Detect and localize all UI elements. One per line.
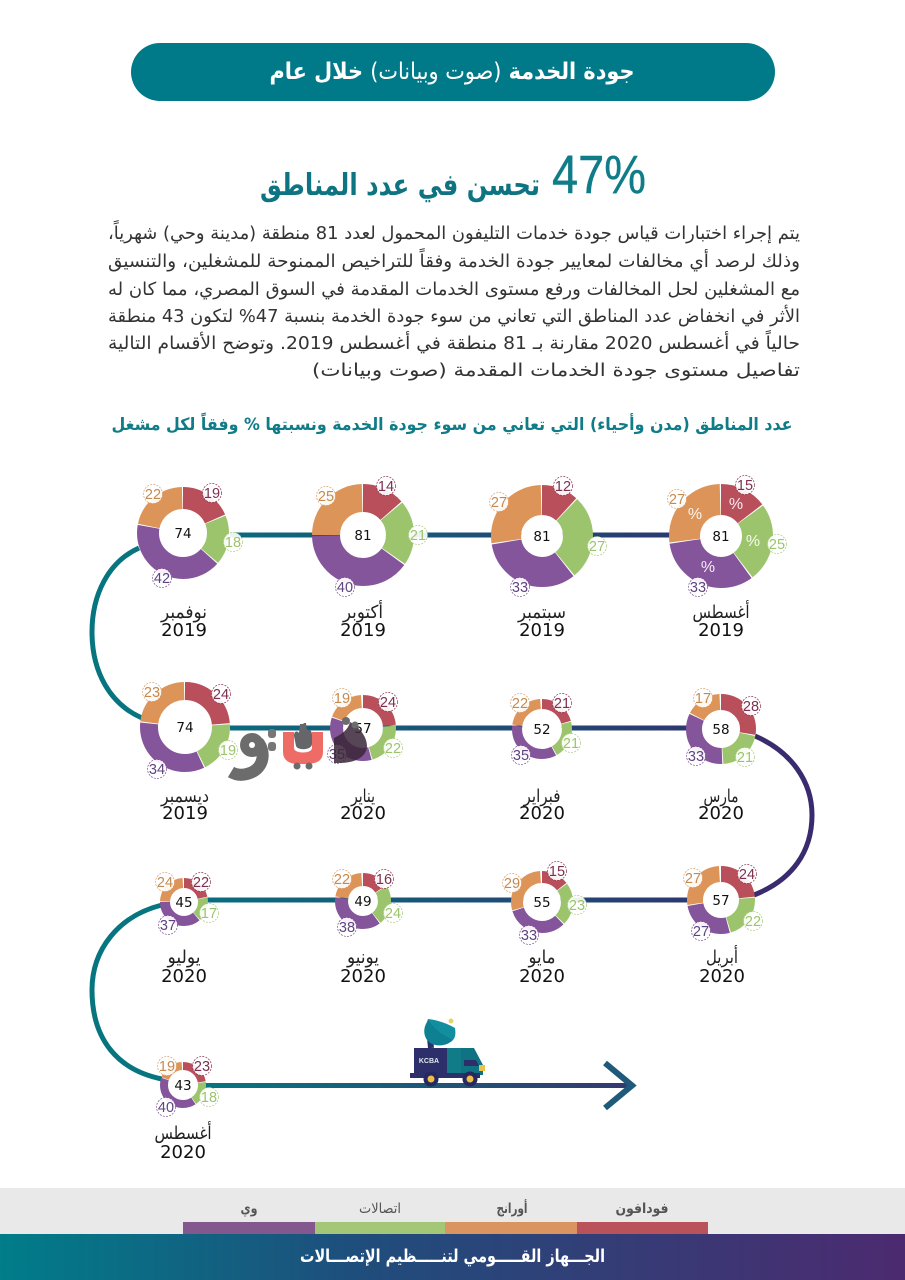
donut: June 2020 [332, 870, 402, 936]
donut: August 2020: 19 [159, 1059, 175, 1075]
donut: September 2019: 27 [589, 539, 605, 555]
donut: April 2020: 24 [739, 867, 755, 883]
donut: August 2019: % [729, 496, 743, 513]
donut: February 2020: 52 [533, 722, 551, 738]
intro paragraph: تفاصيل مستوى جودة الخدمات المقدمة (صوت وبيانات) [312, 360, 800, 381]
legend: Etisalat: اتصالات [359, 1201, 401, 1217]
label: August 2019: 2019 [698, 620, 744, 641]
label: February 2020: 2020 [519, 803, 565, 824]
label: June 2020: يونيو [346, 947, 379, 968]
label: February 2020 [519, 786, 565, 824]
intro paragraph: وذلك لرصد أي مخالفات لمعايير جودة الخدمة وفقاً للتراخيص الممنوحة للمشغلين، والتنسيق [108, 248, 800, 272]
label: July 2020: 2020 [161, 966, 207, 987]
donut: February 2020 [510, 694, 580, 764]
label: October 2019: 2019 [340, 620, 386, 641]
label: December 2019: 2019 [162, 803, 208, 824]
donut: November 2019: 22 [145, 487, 161, 503]
label: April 2020: أبريل [706, 945, 738, 968]
title banner: جودة الخدمة (صوت وبيانات) خلال عام [270, 59, 634, 85]
headline: 47% improvement: 47% [552, 145, 646, 205]
donut: June 2020: 22 [334, 872, 350, 888]
intro paragraph: الأثر في انخفاض عدد المناطق التي تعاني من سوء جودة الخدمة بنسبة 47% لتكون 43 منطقة [108, 305, 800, 327]
donut: January 2020: 35 [329, 747, 345, 763]
donut: June 2020: 49 [354, 894, 372, 910]
label: January 2020: 2020 [340, 803, 386, 824]
donut: November 2019: 19 [204, 486, 220, 502]
donut: March 2020 [686, 688, 760, 766]
legend: Orange [445, 1199, 577, 1234]
label: December 2019: ديسمبر [160, 786, 209, 807]
headline: 47% improvement [260, 145, 646, 205]
label: November 2019: 2019 [161, 620, 207, 641]
donut: November 2019: 18 [225, 535, 241, 551]
legend: Etisalat [315, 1201, 445, 1234]
donut: September 2019: 12 [555, 479, 571, 495]
footer bar [0, 1234, 905, 1280]
label: August 2020: 2020 [160, 1142, 206, 1163]
headline: 47% improvement: تحسن في عدد المناطق [260, 168, 540, 203]
donut: August 2019: % [746, 533, 760, 550]
donut: February 2020: 35 [513, 748, 529, 764]
intro paragraph [108, 220, 800, 381]
label: November 2019: نوفمبر [160, 602, 207, 623]
legend: Vodafone: فودافون [616, 1201, 668, 1217]
donut: April 2020: 22 [745, 914, 761, 930]
donut: July 2020 [156, 872, 218, 934]
intro paragraph: حالياً في أغسطس 2020 مقارنة بـ 81 منطقة في أغسطس 2019. وتوضح الأقسام التالية [108, 330, 800, 354]
donut: December 2019: 23 [144, 685, 160, 701]
donut: October 2019: 25 [318, 489, 334, 505]
donut: November 2019: 42 [154, 571, 170, 587]
donut: August 2020: 40 [158, 1100, 174, 1116]
donut: August 2019: 81 [712, 529, 730, 545]
donut: March 2020: 21 [737, 750, 753, 766]
label: December 2019 [160, 786, 209, 824]
label: March 2020: مارس [704, 786, 738, 807]
label: September 2019: سبتمبر [517, 602, 566, 623]
donut: September 2019: 27 [491, 495, 507, 511]
donut: March 2020: 28 [743, 699, 759, 715]
donut: August 2019: 33 [690, 580, 706, 596]
label: September 2019 [517, 602, 566, 641]
donut: January 2020 [328, 688, 402, 764]
donut: January 2020: 57 [354, 721, 372, 737]
donut: May 2020: 33 [521, 928, 537, 944]
label: May 2020: 2020 [519, 966, 565, 987]
donut: October 2019: 81 [354, 528, 372, 544]
label: February 2020: فبراير [523, 786, 560, 807]
donut: June 2020: 24 [385, 906, 401, 922]
legend: Vodafone [577, 1201, 708, 1234]
donut: July 2020: 22 [193, 875, 209, 891]
label: April 2020 [699, 945, 745, 987]
legend: WE [183, 1201, 315, 1234]
donut: August 2019 [668, 476, 786, 596]
icon: network truck with dish [410, 1018, 485, 1086]
donut: October 2019: 14 [378, 479, 394, 495]
donut: August 2020 [156, 1056, 218, 1116]
label: June 2020 [340, 947, 386, 987]
donut: March 2020: 33 [688, 749, 704, 765]
donut: December 2019: 24 [213, 687, 229, 703]
donut: January 2020: 22 [385, 741, 401, 757]
donut: July 2020: 24 [157, 875, 173, 891]
donut: January 2020: 24 [380, 695, 396, 711]
donut: August 2020: 43 [174, 1078, 192, 1094]
footer bar: الجـــهاز القـــــومي لتنـــــظيم الإتصـــالات [300, 1246, 605, 1267]
donut: July 2020: 17 [201, 906, 217, 922]
legend band [0, 1188, 905, 1234]
label: September 2019: 2019 [519, 620, 565, 641]
watermark logo [231, 717, 367, 775]
donut: July 2020: 37 [160, 918, 176, 934]
donut: July 2020: 45 [175, 895, 193, 911]
donut: December 2019: 74 [176, 720, 194, 736]
donut: October 2019: 21 [410, 528, 426, 544]
label: April 2020: 2020 [699, 966, 745, 987]
label: July 2020 [161, 947, 207, 987]
donut: May 2020: 15 [549, 864, 565, 880]
donut: October 2019: 40 [337, 580, 353, 596]
donut: February 2020: 21 [554, 696, 570, 712]
label: June 2020: 2020 [340, 966, 386, 987]
donut: June 2020: 16 [376, 872, 392, 888]
donut: May 2020 [502, 862, 586, 944]
donut: March 2020: 58 [712, 722, 730, 738]
donut: February 2020: 22 [512, 696, 528, 712]
donut: February 2020: 21 [563, 736, 579, 752]
label: August 2020 [154, 1121, 212, 1163]
donut: August 2020: 18 [201, 1090, 217, 1106]
label: November 2019 [160, 602, 207, 641]
intro paragraph: مع المشغلين لحل المخالفات ورفع مستوى الخدمات المقدمة في السوق المصري، مما كان له [108, 279, 800, 300]
donut: August 2019: 15 [737, 478, 753, 494]
donut: August 2019: 27 [669, 492, 685, 508]
donut: August 2019: 25 [769, 537, 785, 553]
donut: September 2019 [490, 476, 606, 596]
icon: network truck with dish: KCBA [419, 1058, 439, 1065]
donut: September 2019: 33 [512, 580, 528, 596]
label: July 2020: يوليو [167, 947, 200, 968]
legend: Orange: أورانج [496, 1199, 528, 1217]
label: August 2019: أغسطس [692, 600, 750, 623]
timeline path [92, 535, 812, 1079]
donut: May 2020: 29 [504, 876, 520, 892]
donut: December 2019: 34 [149, 762, 165, 778]
donut: December 2019 [142, 682, 238, 778]
label: October 2019: أكتوبر [342, 600, 383, 623]
chart subtitle: عدد المناطق (مدن وأحياء) التي تعاني من سوء جودة الخدمة ونسبتها % وفقاً لكل مشغل [112, 411, 792, 435]
intro paragraph: يتم إجراء اختبارات قياس جودة خدمات التليفون المحمول لعدد 81 منطقة (مدينة وحي) شهرياً، [108, 220, 800, 244]
donut: January 2020: 19 [334, 691, 350, 707]
label: January 2020 [340, 786, 386, 824]
donut: December 2019: 19 [220, 743, 236, 759]
label: May 2020: مايو [528, 947, 556, 968]
donut: September 2019: 81 [533, 529, 551, 545]
arrow to the future [205, 1063, 632, 1108]
donut: November 2019: 74 [174, 526, 192, 542]
title banner [131, 43, 775, 101]
donut: May 2020: 23 [569, 898, 585, 914]
label: March 2020: 2020 [698, 803, 744, 824]
donut: June 2020: 38 [339, 920, 355, 936]
donut: April 2020: 27 [685, 871, 701, 887]
label: August 2020: أغسطس [154, 1121, 212, 1144]
donut: March 2020: 17 [695, 691, 711, 707]
label: May 2020 [519, 947, 565, 987]
label: March 2020 [698, 786, 744, 824]
donut: October 2019 [316, 476, 428, 596]
label: August 2019 [692, 600, 750, 641]
donut: November 2019 [144, 484, 242, 588]
donut: August 2019: % [701, 559, 715, 576]
donut: August 2019: % [688, 506, 702, 523]
legend: WE: وي [240, 1201, 258, 1218]
donut: April 2020 [684, 864, 762, 940]
donut: August 2020: 23 [194, 1059, 210, 1075]
label: January 2020: يناير [350, 786, 375, 807]
donut: April 2020: 57 [712, 893, 730, 909]
donut: May 2020: 55 [533, 895, 551, 911]
donut: April 2020: 27 [693, 924, 709, 940]
label: October 2019 [340, 600, 386, 641]
